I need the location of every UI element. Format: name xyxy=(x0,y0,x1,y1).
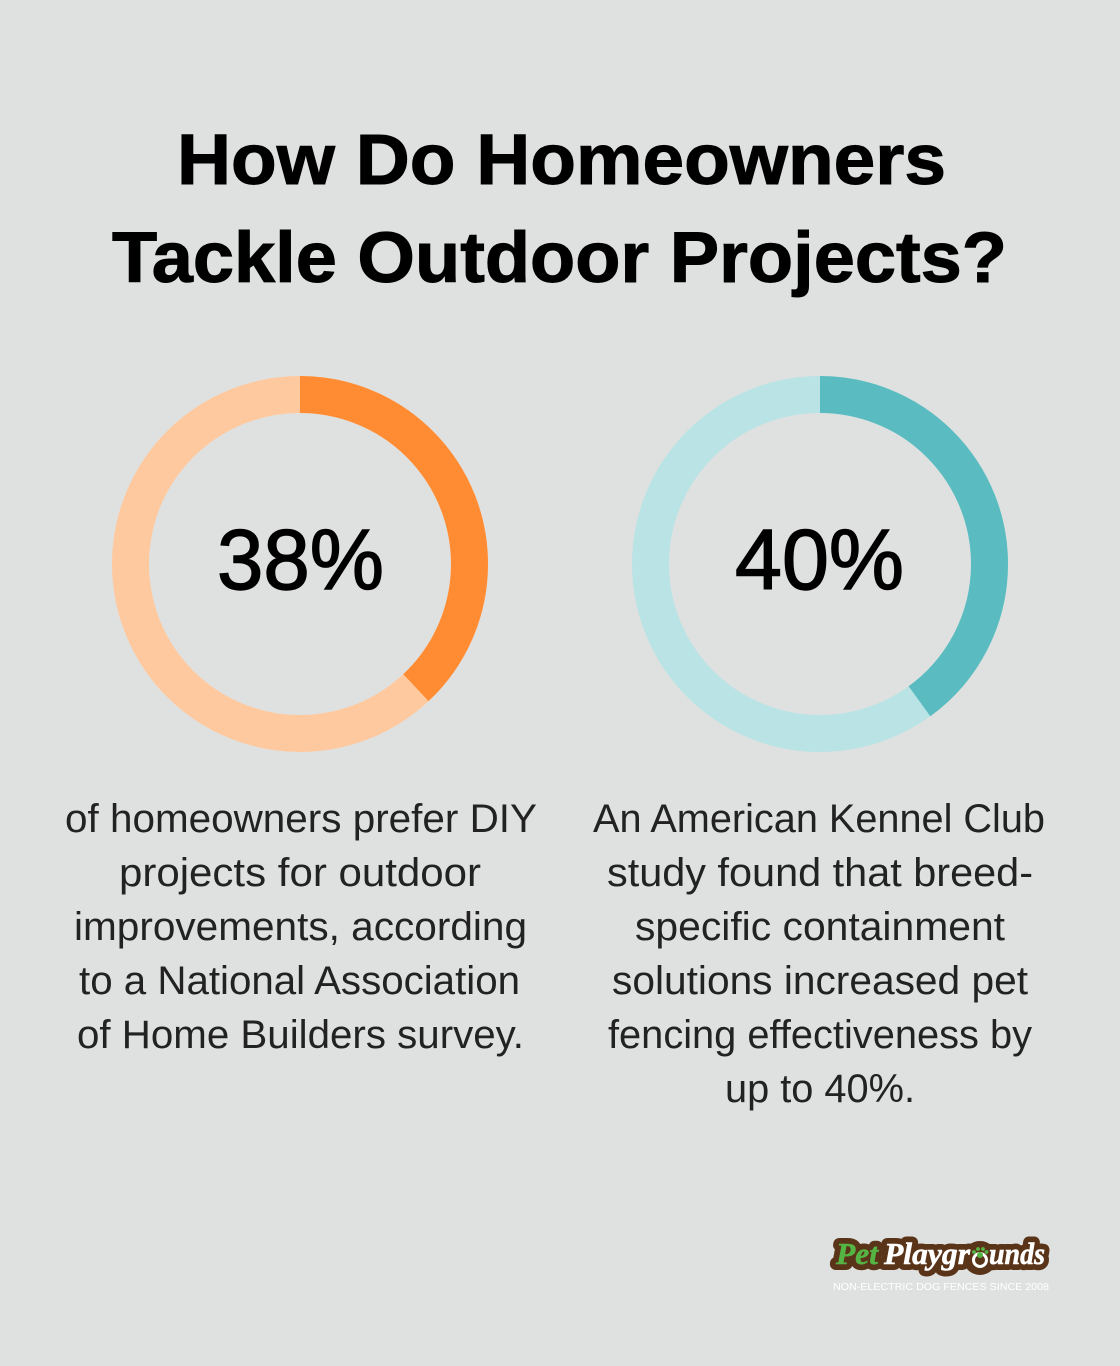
donut chart: 40%: 40% xyxy=(735,513,904,608)
text block: Kennel Club description xyxy=(593,797,1045,1111)
donut chart: 40% xyxy=(650,394,990,734)
text block: DIY description: of homeowners prefer DIY xyxy=(65,797,537,841)
logo wordmark: Pet xyxy=(835,1236,879,1271)
panel: 38% DIY statistic xyxy=(65,394,537,1057)
text block: Kennel Club description: fencing effectiveness by xyxy=(608,1013,1032,1057)
logo outline: unds xyxy=(989,1236,1045,1271)
logo wordmark: unds xyxy=(989,1236,1045,1271)
text block: Kennel Club description: study found that breed- xyxy=(607,851,1033,895)
logo outline xyxy=(835,1236,1045,1271)
logo outline: Pet xyxy=(835,1236,879,1271)
icon: paw print xyxy=(972,1247,988,1266)
text block: DIY description xyxy=(65,797,537,1057)
logo tagline: NON-ELECTRIC DOG FENCES SINCE 2008 xyxy=(833,1282,1049,1293)
text block: Kennel Club description: solutions increased pet xyxy=(612,959,1028,1003)
logo wordmark xyxy=(835,1236,1045,1271)
title: How Do Homeowners xyxy=(177,121,946,200)
text block: Kennel Club description: An American Kennel Club xyxy=(593,797,1045,841)
logo wordmark: Playgr xyxy=(883,1236,971,1271)
text block: DIY description: improvements, according xyxy=(74,905,527,949)
logo outline: Playgr xyxy=(883,1236,971,1271)
text block: Kennel Club description: specific containment xyxy=(635,905,1005,949)
text block: DIY description: projects for outdoor xyxy=(119,851,481,895)
panel: 40% containment statistic xyxy=(593,394,1045,1111)
text block: Kennel Club description: up to 40%. xyxy=(725,1067,915,1111)
text block: DIY description: of Home Builders survey. xyxy=(77,1013,524,1057)
donut chart: 38%: 38% xyxy=(217,513,384,608)
text block: DIY description: to a National Association xyxy=(79,959,520,1003)
donut chart: 38% xyxy=(130,394,470,734)
logo: Pet Playgrounds xyxy=(833,1236,1049,1293)
title xyxy=(112,121,1007,298)
title: Tackle Outdoor Projects? xyxy=(112,219,1007,298)
